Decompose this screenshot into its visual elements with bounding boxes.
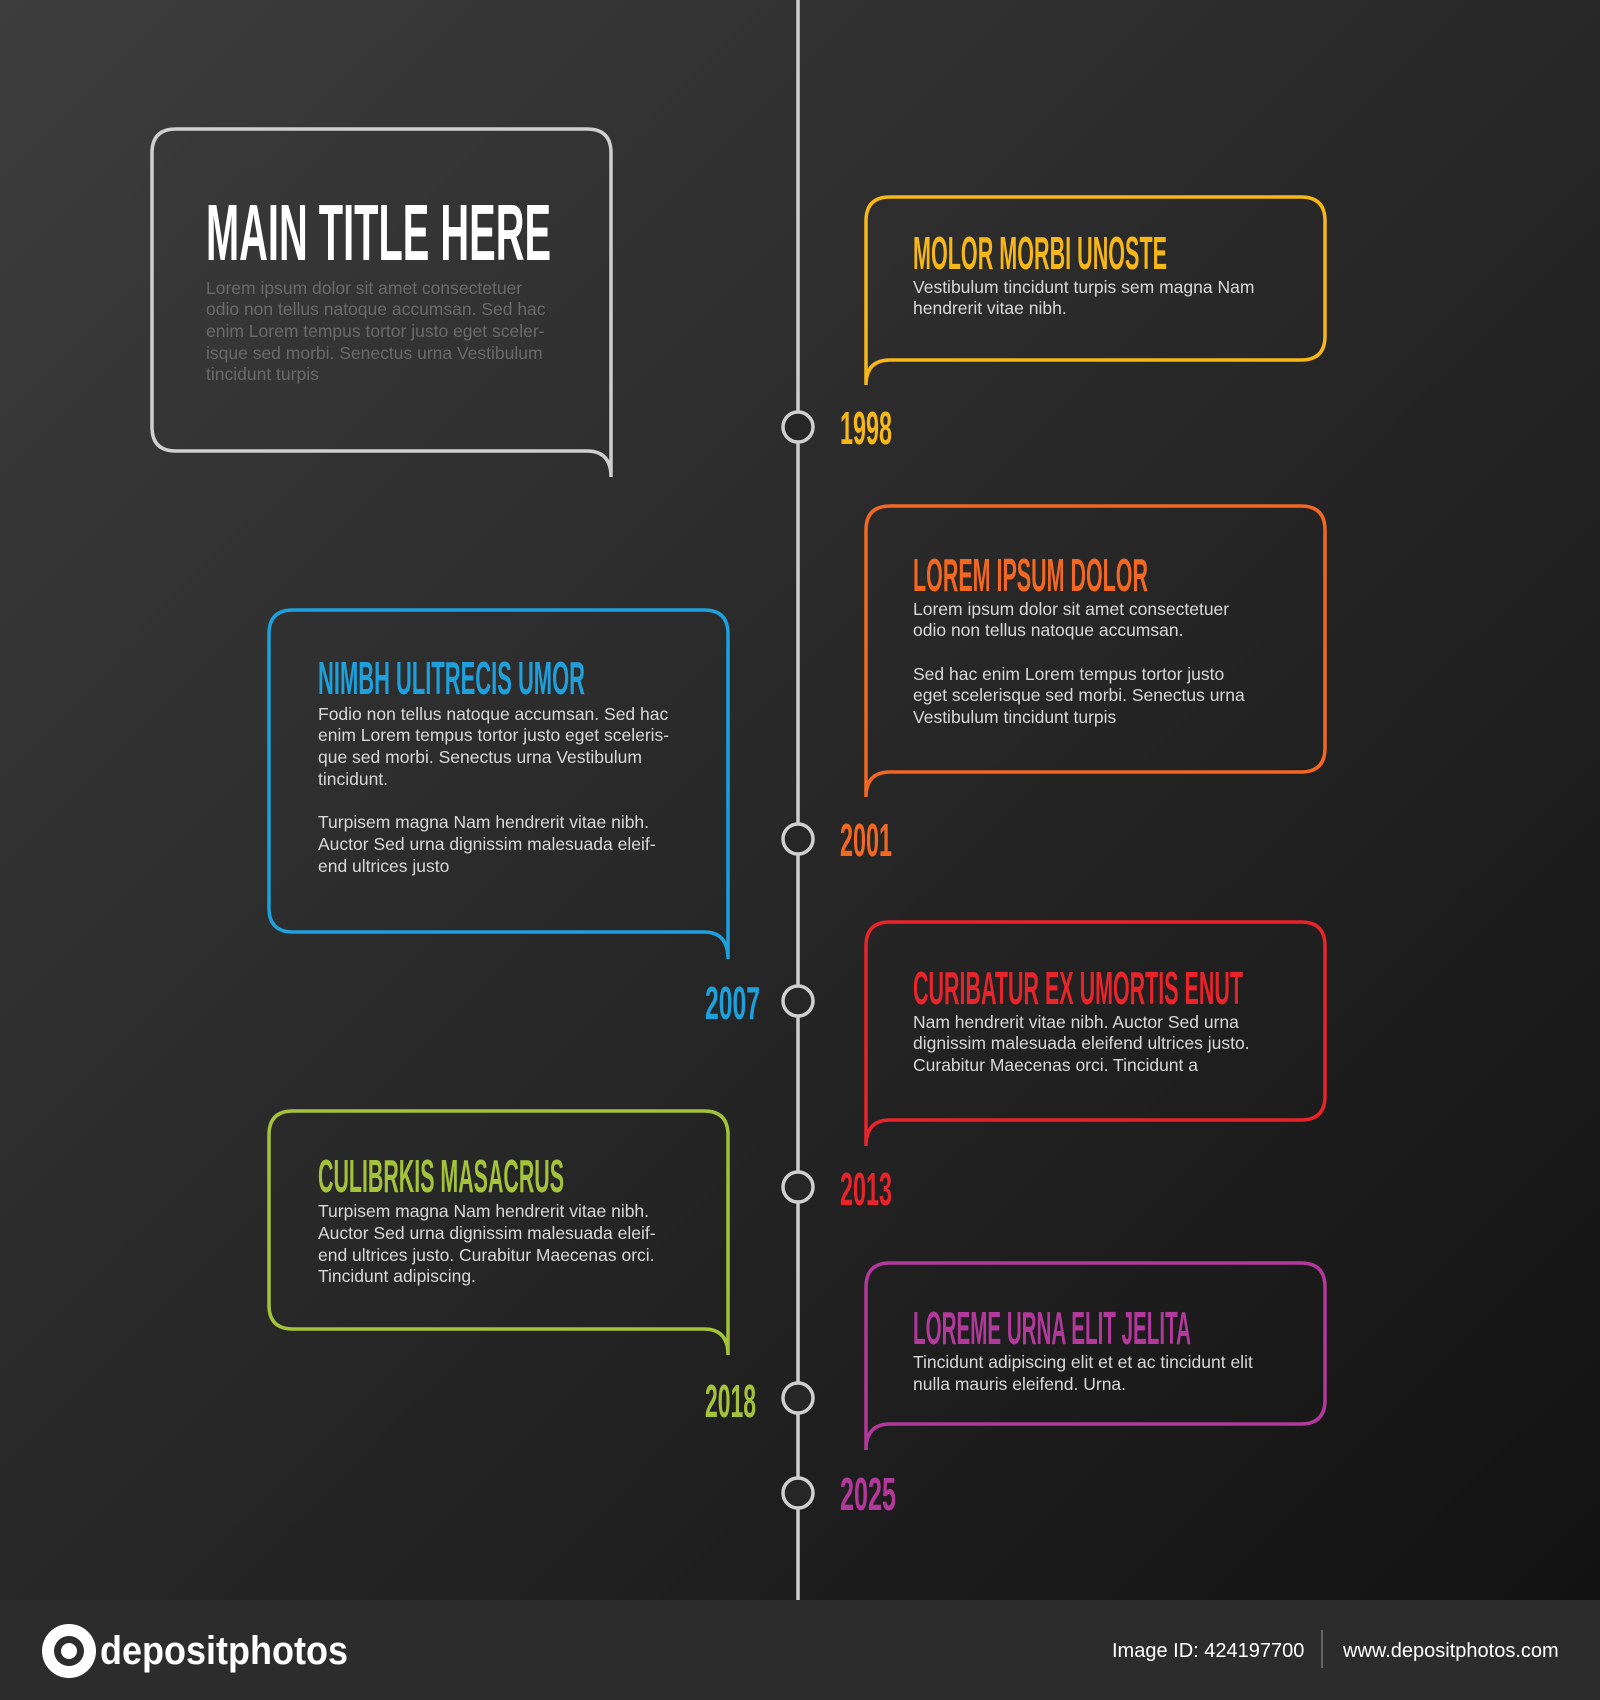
year labels: 2025 [840,1468,896,1520]
panel: 1998 yellow: hendrerit vitae nibh. [913,298,1067,318]
panel: 2001 orange: odio non tellus natoque accumsan. [913,620,1183,640]
title description: isque sed morbi. Senectus urna Vestibulum [206,343,543,363]
title description: odio non tellus natoque accumsan. Sed hac [206,299,546,319]
panel: 2007 blue: NIMBH ULITRECIS UMOR [318,652,585,704]
panel: 2013 red [866,922,1325,1146]
panel: 2007 blue: enim Lorem tempus tortor justo eget sceleris- [318,725,669,745]
panel: 2001 orange: Lorem ipsum dolor sit amet consectetuer [913,599,1229,619]
panel: 2018 green: CULIBRKIS MASACRUS [318,1150,564,1202]
title description: tincidunt turpis [206,364,319,384]
footer: Image ID: 424197700 [1112,1640,1304,1662]
title box [152,129,611,477]
year labels: 2018 [705,1375,756,1427]
panel: 1998 yellow [866,197,1325,385]
panel: 2001 orange: eget scelerisque sed morbi. Senectus urna [913,685,1245,705]
panel: 2025 purple: LOREME URNA ELIT JELITA [913,1302,1191,1354]
panel: 2013 red: dignissim malesuada eleifend ultrices justo. [913,1033,1250,1053]
panel: 2025 purple: nulla mauris eleifend. Urna. [913,1374,1126,1394]
panel: 2007 blue: end ultrices justo [318,856,449,876]
panel: 2018 green [269,1111,728,1355]
footer: www.depositphotos.com [1342,1640,1559,1662]
panel: 2018 green: Turpisem magna Nam hendrerit vitae nibh. [318,1201,649,1221]
panel: 2025 purple [866,1263,1325,1450]
year labels: 2007 [705,977,760,1029]
panel: 2007 blue: que sed morbi. Senectus urna Vestibulum [318,747,642,767]
panel: 2013 red: Curabitur Maecenas orci. Tincidunt a [913,1055,1198,1075]
title description: Lorem ipsum dolor sit amet consectetuer [206,278,522,298]
timeline dots [783,412,813,1508]
panel: 2007 blue: Fodio non tellus natoque accumsan. Sed hac [318,704,668,724]
year labels: 2013 [840,1163,892,1215]
panel: 2001 orange: Sed hac enim Lorem tempus tortor justo [913,664,1224,684]
timeline line [796,0,800,1600]
panel: 2013 red: Nam hendrerit vitae nibh. Auctor Sed urna [913,1012,1239,1032]
panel: 2007 blue [269,610,728,959]
title description: enim Lorem tempus tortor justo eget sceler- [206,321,545,341]
panel: 2001 orange [866,506,1325,797]
year labels: 1998 [840,402,892,454]
panel: 2013 red: CURIBATUR EX UMORTIS ENUT [913,962,1243,1014]
panel: 1998 yellow: Vestibulum tincidunt turpis sem magna Nam [913,277,1254,297]
panel: 2007 blue: Auctor Sed urna dignissim malesuada eleif- [318,834,656,854]
title box: MAIN TITLE HERE [206,188,551,277]
icon: camera logo [42,1624,96,1678]
year labels: 2001 [840,814,892,866]
footer [0,1600,1600,1700]
panel: 2025 purple: Tincidunt adipiscing elit et et ac tincidunt elit [913,1352,1253,1372]
panel: 1998 yellow: MOLOR MORBI UNOSTE [913,227,1167,279]
panel: 2001 orange: LOREM IPSUM DOLOR [913,549,1148,601]
year labels [705,402,896,1520]
panel: 2001 orange: Vestibulum tincidunt turpis [913,707,1117,727]
panel: 2007 blue: Turpisem magna Nam hendrerit vitae nibh. [318,812,649,832]
footer: depositphotos [100,1629,348,1673]
panel: 2007 blue: tincidunt. [318,769,388,789]
title description [206,278,546,384]
panel: 2018 green: Tincidunt adipiscing. [318,1266,476,1286]
panel: 2018 green: end ultrices justo. Curabitur Maecenas orci. [318,1245,655,1265]
panel: 2018 green: Auctor Sed urna dignissim malesuada eleif- [318,1223,656,1243]
